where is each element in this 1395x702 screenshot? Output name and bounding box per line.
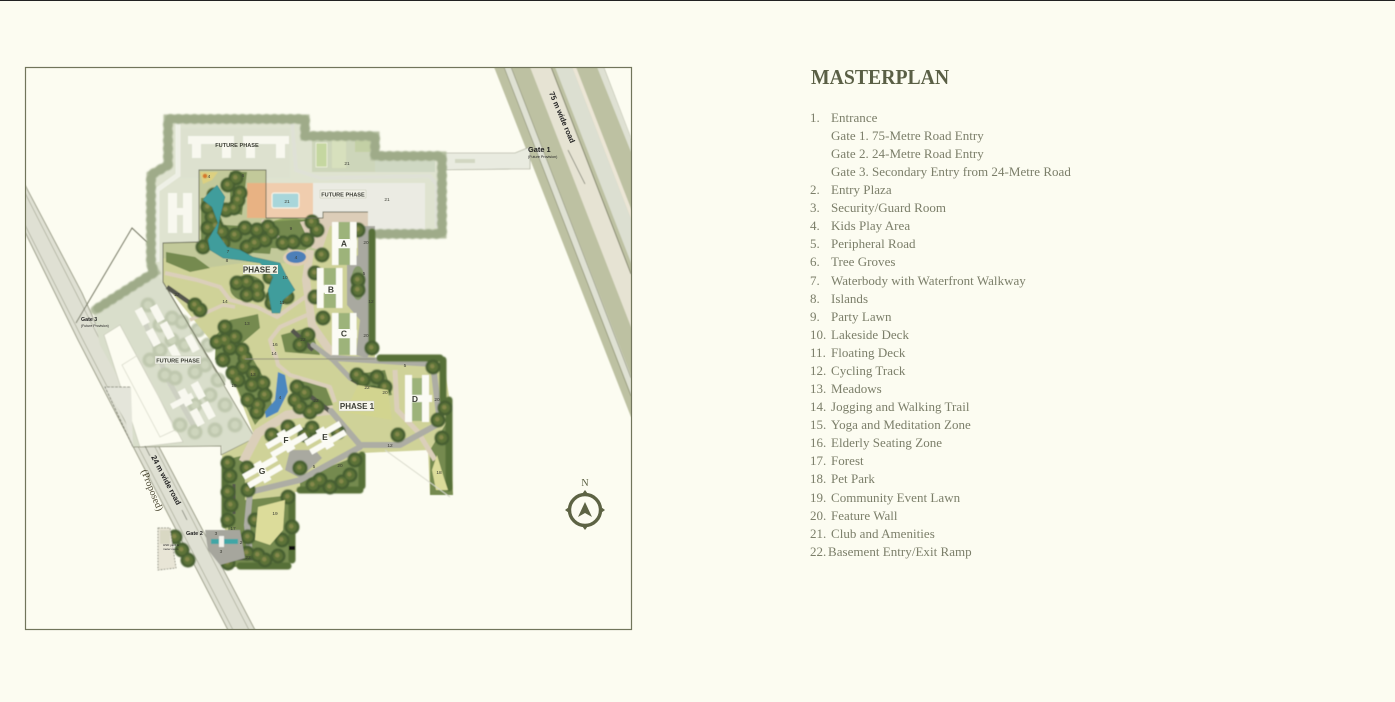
entry plaza and peach decks — [200, 172, 368, 250]
tower letters: G — [259, 466, 266, 476]
future phase north and east — [148, 115, 445, 282]
road and gate labels: (Future Provision) — [528, 155, 557, 159]
legend list: 17. — [810, 453, 826, 468]
plan key numbers: 15 — [231, 383, 237, 389]
legend list: Jogging and Walking Trail — [831, 399, 970, 414]
lawn meadow — [163, 258, 310, 358]
phase and future phase labels — [155, 143, 442, 561]
plan key numbers: 11 — [280, 300, 285, 306]
legend list: 9. — [810, 309, 820, 324]
legend list: Islands — [831, 291, 868, 306]
plan key numbers: 22 — [364, 385, 370, 391]
legend list: Gate 1. 75-Metre Road Entry — [831, 128, 984, 143]
plan key numbers: 12 — [387, 443, 393, 449]
legend list: 18. — [810, 471, 826, 486]
legend list — [810, 110, 1071, 559]
phase and future phase labels: FUTURE PHASE — [215, 143, 259, 149]
plan key numbers — [174, 161, 442, 561]
plan key numbers: 22 — [313, 398, 319, 404]
legend list: Community Event Lawn — [831, 490, 960, 505]
legend list: Cycling Track — [831, 363, 905, 378]
road and gate labels: (Future Provision) — [81, 324, 109, 328]
legend list: 14. — [810, 399, 826, 414]
plan key numbers: 20 — [337, 463, 343, 469]
plan key numbers: 22 — [174, 292, 180, 298]
legend list: 4. — [810, 218, 820, 233]
road and gate labels: Gate 2 — [186, 531, 203, 537]
plan key numbers: 12 — [368, 299, 374, 305]
legend list: 19. — [810, 490, 826, 505]
title: MASTERPLAN — [811, 65, 949, 89]
legend list: 10. — [810, 327, 826, 342]
tower courtyards — [324, 222, 423, 421]
site: phase one and two grounds — [163, 170, 453, 567]
plan key numbers: 4 — [208, 174, 211, 180]
plan key numbers: 5 — [404, 363, 407, 369]
legend list: 3. — [810, 200, 820, 215]
legend list: 21. — [810, 526, 826, 541]
plan key numbers: 17 — [230, 526, 236, 532]
plan key numbers: 14 — [222, 299, 228, 305]
residential towers — [241, 222, 432, 491]
legend list: 20. — [810, 508, 826, 523]
map frame — [26, 68, 632, 630]
legend list: 6. — [810, 254, 820, 269]
plan key numbers: 5 — [363, 271, 366, 277]
plan key numbers: 20 — [363, 333, 369, 339]
tower letters: E — [322, 432, 328, 442]
cream mask beyond road — [604, 67, 632, 140]
legend list: Party Lawn — [831, 309, 892, 324]
legend list: Feature Wall — [831, 508, 898, 523]
kids play pool — [283, 250, 309, 266]
legend list: 8. — [810, 291, 820, 306]
tower letters — [259, 238, 418, 476]
phase and future phase labels: PHASE 2 — [243, 266, 278, 274]
event lawn and pet park — [255, 385, 448, 545]
tower letters: F — [283, 435, 289, 445]
legend list: 15. — [810, 417, 826, 432]
legend list: Yoga and Meditation Zone — [831, 417, 971, 432]
legend list: Waterbody with Waterfront Walkway — [831, 273, 1026, 288]
legend list: 11. — [810, 345, 826, 360]
plan key numbers: 10 — [282, 275, 288, 281]
legend list: Entry Plaza — [831, 182, 892, 197]
tower letters: B — [328, 284, 334, 294]
tree canopy — [174, 177, 449, 566]
plan key numbers: 20 — [382, 390, 388, 396]
legend list: Lakeside Deck — [831, 327, 909, 342]
legend list: 16. — [810, 435, 826, 450]
legend list: Forest — [831, 453, 864, 468]
gate 1 approach road — [430, 147, 530, 170]
dimension lines — [145, 150, 585, 520]
forest and dark lawn patches — [166, 172, 453, 567]
legend list: 7. — [810, 273, 820, 288]
road and gate labels: meter room — [163, 547, 179, 551]
plan key numbers: 20 — [434, 397, 440, 403]
plan key numbers: 21 — [344, 161, 350, 167]
future phase west — [76, 228, 255, 455]
tower letters: D — [412, 394, 418, 404]
road and gate labels: (Proposed) — [138, 468, 165, 513]
peripheral road — [247, 226, 440, 555]
plan key numbers: 22 — [245, 555, 251, 561]
24 m wide road — [25, 185, 255, 630]
plan key numbers: 21 — [384, 197, 390, 203]
tower letters: C — [341, 328, 347, 338]
legend list: Gate 2. 24-Metre Road Entry — [831, 146, 984, 161]
phase and future phase labels: FUTURE PHASE — [321, 192, 365, 198]
waterbody — [203, 185, 295, 313]
pale hedges and trees — [95, 119, 442, 432]
masterplan site map — [24, 66, 632, 630]
legend list: Entrance — [831, 110, 877, 125]
pale future buildings — [135, 136, 289, 427]
legend list: Kids Play Area — [831, 218, 910, 233]
plan key numbers: 22 — [300, 337, 306, 343]
plan key numbers: 16 — [272, 342, 278, 348]
plan key numbers: 14 — [271, 351, 277, 357]
boundary lines — [163, 170, 450, 550]
phase divider line — [245, 358, 375, 360]
plan key numbers: 6 — [242, 173, 245, 179]
plan key numbers: 18 — [436, 470, 442, 476]
legend list: Security/Guard Room — [831, 200, 946, 215]
plan key numbers: 3 — [215, 531, 218, 537]
compass — [565, 478, 605, 530]
legend list: Gate 3. Secondary Entry from 24-Metre Road — [831, 164, 1071, 179]
legend list: Club and Amenities — [831, 526, 935, 541]
road and gate labels: 24 m wide road — [149, 454, 183, 507]
legend list: Floating Deck — [831, 345, 905, 360]
road and gate labels: Gate 3 — [81, 317, 97, 323]
legend list: 22. — [810, 544, 826, 559]
legend list: Tree Groves — [831, 254, 895, 269]
plan key numbers: 21 — [284, 199, 290, 205]
plan key numbers: 8 — [226, 258, 229, 264]
road and gate labels: 75 m wide road — [547, 90, 577, 145]
legend list: Basement Entry/Exit Ramp — [828, 544, 972, 559]
plan key numbers: 19 — [272, 511, 278, 517]
road and gate labels: Gate 1 — [528, 145, 551, 154]
phase and future phase labels: PHASE 1 — [340, 402, 375, 411]
plan key numbers: 3 — [220, 549, 223, 555]
plan key numbers: 7 — [227, 249, 230, 255]
legend list: Elderly Seating Zone — [831, 435, 942, 450]
legend list: Peripheral Road — [831, 236, 916, 251]
legend list: Meadows — [831, 381, 882, 396]
gate 2 forecourt — [158, 528, 245, 570]
legend list: 1. — [810, 110, 820, 125]
plan key numbers: 2 — [240, 540, 243, 546]
legend list: 5. — [810, 236, 820, 251]
75 m wide road — [494, 68, 631, 418]
legend list: 12. — [810, 363, 826, 378]
plan key numbers: 4 — [295, 255, 298, 261]
phase and future phase labels: FUTURE PHASE — [156, 358, 200, 364]
compass: N — [581, 478, 589, 489]
plan key numbers: 9 — [290, 226, 293, 232]
road and gate labels: HSD yard & — [163, 543, 179, 547]
plan key numbers: 13 — [250, 372, 256, 378]
legend list: Pet Park — [831, 471, 875, 486]
road and gate labels — [81, 90, 577, 551]
basement ramps — [167, 287, 375, 558]
plan key numbers: 4 — [279, 395, 282, 401]
plan key numbers: 13 — [244, 321, 250, 327]
plan key numbers: 20 — [363, 240, 369, 246]
legend list: 2. — [810, 182, 820, 197]
plan key numbers: 5 — [313, 464, 316, 470]
jogging trails — [165, 220, 435, 462]
tower letters: A — [341, 238, 347, 248]
south pool — [265, 372, 288, 418]
legend list: 13. — [810, 381, 826, 396]
